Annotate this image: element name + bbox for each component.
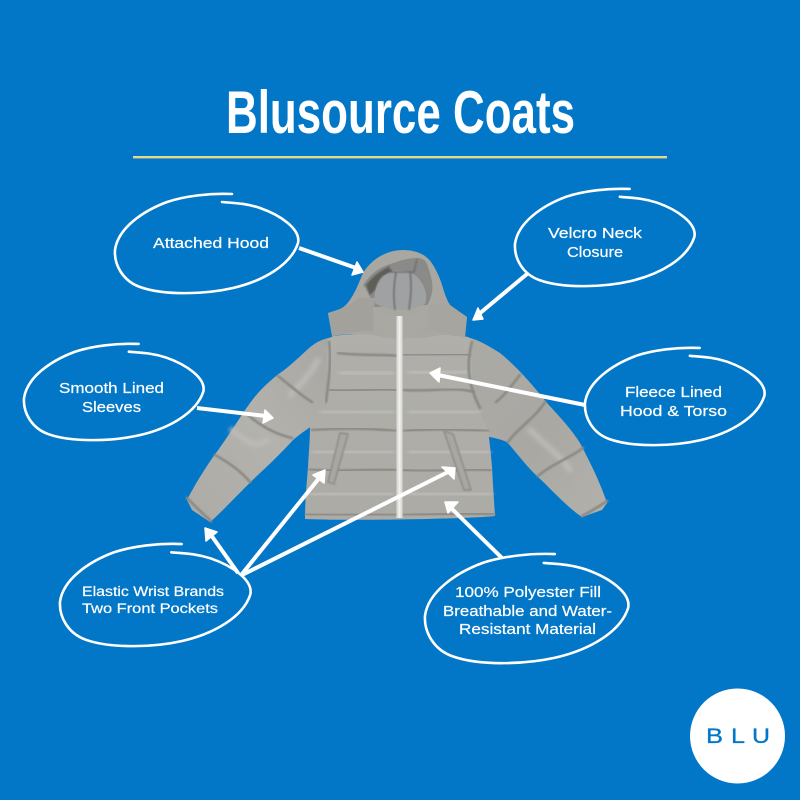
- hood lining: [375, 270, 426, 310]
- collar: [373, 305, 428, 339]
- velcro flap right: [428, 303, 467, 337]
- callout: Velcro Neck Closure: [515, 189, 695, 286]
- left pocket: [328, 433, 348, 484]
- arrow: to torso lining: [430, 368, 585, 405]
- title: Blusource Coats: [226, 79, 575, 146]
- left sleeve: [187, 337, 335, 522]
- callout: Polyester Fill and material: 100% Polyester Fill: [455, 585, 601, 601]
- hood shadow: [366, 267, 392, 295]
- arrow: to wrist: [205, 528, 238, 573]
- callout: Elastic Wrist Brands, Two Front Pockets: Elastic Wrist Brands: [82, 584, 224, 599]
- callout: Polyester Fill and material: Breathable and Water-: [443, 604, 612, 620]
- callout: Fleece Lined Hood and Torso: Hood & Torso: [620, 404, 727, 420]
- arrow: to hem: [445, 502, 502, 558]
- hood lining seams: [388, 259, 417, 310]
- arrow: to neck closure: [473, 274, 527, 320]
- arrow: to sleeve: [197, 408, 273, 423]
- hood interior: [363, 258, 432, 307]
- callout: Polyester Fill and material: [425, 554, 628, 663]
- arrow: to right pocket: [242, 467, 455, 575]
- velcro flap left: [328, 298, 375, 336]
- logo badge: U: [752, 725, 770, 748]
- callout: Smooth Lined Sleeves: Sleeves: [82, 400, 141, 416]
- title underline: [133, 156, 667, 158]
- callout: Attached Hood: [115, 194, 298, 293]
- arrow: to hood: [299, 248, 363, 275]
- logo badge: L: [731, 725, 745, 748]
- logo badge: [690, 688, 785, 784]
- callout: Polyester Fill and material: Resistant Material: [459, 622, 596, 638]
- torso: [305, 333, 495, 520]
- callout: Fleece Lined Hood and Torso: Fleece Lined: [625, 385, 722, 401]
- zipper: [396, 316, 402, 518]
- callout: Smooth Lined Sleeves: [24, 344, 204, 440]
- right pocket: [444, 431, 471, 490]
- callout: Attached Hood: Attached Hood: [153, 236, 269, 252]
- callout: Velcro Neck Closure: Closure: [567, 245, 623, 261]
- jacket illustration: [187, 250, 607, 522]
- callout: Velcro Neck Closure: Velcro Neck: [548, 226, 643, 242]
- hood: [328, 250, 467, 338]
- callout: Smooth Lined Sleeves: Smooth Lined: [59, 381, 164, 397]
- arrow: to left pocket: [242, 470, 325, 574]
- logo badge: B: [706, 725, 723, 748]
- callout: Fleece Lined Hood and Torso: [585, 348, 765, 445]
- right sleeve: [466, 337, 607, 517]
- jacket seams: [187, 342, 607, 521]
- callout: Elastic Wrist Brands, Two Front Pockets: [60, 544, 251, 646]
- callout: Elastic Wrist Brands, Two Front Pockets: Two Front Pockets: [82, 601, 218, 616]
